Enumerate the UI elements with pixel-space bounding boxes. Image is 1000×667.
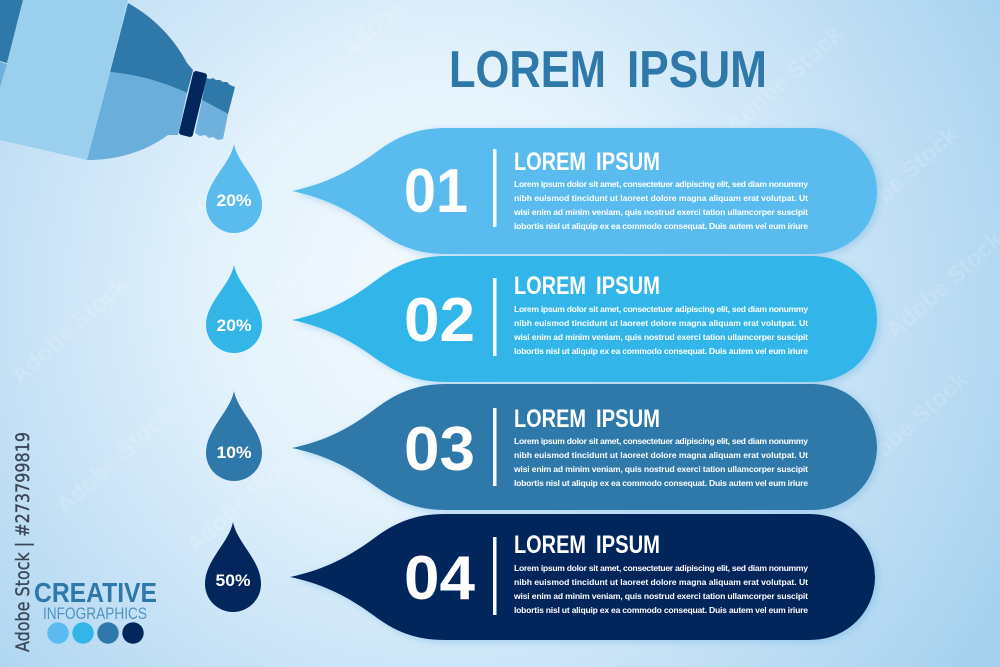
- body text 4: [513, 563, 808, 615]
- body text 1: Lorem ipsum dolor sit amet, consectetuer adipiscing elit, sed diam nonummy: [514, 179, 808, 189]
- bottle neck light: [195, 100, 228, 140]
- body text 1: wisi enim ad minim veniam, quis nostrud exerci tation ullamcorper suscipit: [513, 207, 808, 217]
- heading 1: LOREM: [514, 148, 586, 176]
- stock id vertical text: Adobe Stock | #273799819: [12, 432, 34, 652]
- watermarks: Adobe Stock: [176, 111, 304, 229]
- body text 2: wisi enim ad minim veniam, quis nostrud exerci tation ullamcorper suscipit: [513, 332, 808, 342]
- logo subtitle: INFOGRAPHICS: [43, 604, 147, 623]
- heading 2: LOREM: [514, 272, 586, 300]
- body text 4: wisi enim ad minim veniam, quis nostrud exerci tation ullamcorper suscipit: [513, 591, 808, 601]
- title: IPSUM: [627, 41, 767, 99]
- drop 1: 20%: [216, 192, 252, 210]
- number 04: 04: [404, 544, 476, 613]
- body text 4: lobortis nisl ut aliquip ex ea commodo consequat. Duis autem vel eum iriure: [514, 605, 808, 615]
- body text 3: Lorem ipsum dolor sit amet, consectetuer adipiscing elit, sed diam nonummy: [514, 436, 808, 446]
- watermarks: Adobe Stock: [51, 401, 179, 519]
- divider: [493, 537, 496, 615]
- bottle shoulder light: [87, 72, 187, 160]
- drop 2: [206, 265, 262, 353]
- bottle: [0, 0, 235, 160]
- logo dots: [47, 622, 144, 644]
- watermarks: Adobe Stock: [41, 41, 169, 159]
- body text 3: wisi enim ad minim veniam, quis nostrud exerci tation ullamcorper suscipit: [513, 464, 808, 474]
- drop 3: [206, 391, 262, 481]
- body text 1: [513, 179, 808, 231]
- watermarks: Adobe Stock: [211, 236, 339, 354]
- number 03: 03: [404, 415, 475, 484]
- body text 1: nibh euismod tincidunt ut laoreet dolore magna aliquam erat volutpat. Ut: [514, 193, 808, 203]
- body text 3: lobortis nisl ut aliquip ex ea commodo consequat. Duis autem vel eum iriure: [514, 478, 808, 488]
- body text 2: [513, 304, 808, 356]
- heading 1: IPSUM: [596, 148, 660, 176]
- heading 3: LOREM: [514, 405, 586, 433]
- body text 4: Lorem ipsum dolor sit amet, consectetuer adipiscing elit, sed diam nonummy: [514, 563, 808, 573]
- heading 2: IPSUM: [596, 272, 660, 300]
- drop 1: [206, 144, 262, 233]
- body text 4: nibh euismod tincidunt ut laoreet dolore magna aliquam erat volutpat. Ut: [514, 577, 808, 587]
- body text 2: lobortis nisl ut aliquip ex ea commodo consequat. Duis autem vel eum iriure: [514, 346, 808, 356]
- body text 3: nibh euismod tincidunt ut laoreet dolore magna aliquam erat volutpat. Ut: [514, 450, 808, 460]
- divider: [493, 278, 496, 356]
- body text 2: Lorem ipsum dolor sit amet, consectetuer adipiscing elit, sed diam nonummy: [514, 304, 808, 314]
- body text 2: nibh euismod tincidunt ut laoreet dolore magna aliquam erat volutpat. Ut: [514, 318, 808, 328]
- drop 2: 20%: [216, 317, 252, 335]
- panel 2: [292, 256, 877, 382]
- number 02: 02: [404, 286, 475, 355]
- panel 4: [290, 514, 875, 640]
- bottle label: [0, 0, 128, 160]
- bottle lower left water: [0, 62, 7, 88]
- drop 3: 10%: [216, 444, 252, 462]
- bottle shoulder dark: [110, 3, 193, 93]
- heading 4: IPSUM: [596, 531, 660, 559]
- body text 1: lobortis nisl ut aliquip ex ea commodo consequat. Duis autem vel eum iriure: [514, 221, 808, 231]
- divider: [493, 149, 496, 227]
- watermarks: Adobe Stock: [181, 441, 309, 559]
- body text 3: [513, 436, 808, 488]
- watermarks: Adobe Stock: [721, 511, 849, 629]
- bottle neck dark: [202, 78, 235, 114]
- watermarks: Adobe Stock: [6, 271, 134, 389]
- title: LOREM: [449, 41, 606, 99]
- logo wordmark: CREATIVE: [34, 577, 157, 608]
- logo: [34, 577, 157, 644]
- watermarks: Adobe Stock: [721, 21, 849, 139]
- heading 4: LOREM: [514, 531, 586, 559]
- drop 4: 50%: [216, 572, 251, 590]
- bottle upper left water: [0, 0, 23, 63]
- number 01: 01: [404, 157, 468, 226]
- panel 1: [292, 128, 877, 254]
- drop 4: [205, 522, 261, 612]
- watermarks: Adobe Stock: [836, 121, 964, 239]
- heading 3: IPSUM: [596, 405, 660, 433]
- watermarks: Adobe Stock: [846, 366, 974, 484]
- panel 3: [292, 384, 877, 510]
- bottle cap: [182, 74, 204, 134]
- divider: [493, 408, 496, 486]
